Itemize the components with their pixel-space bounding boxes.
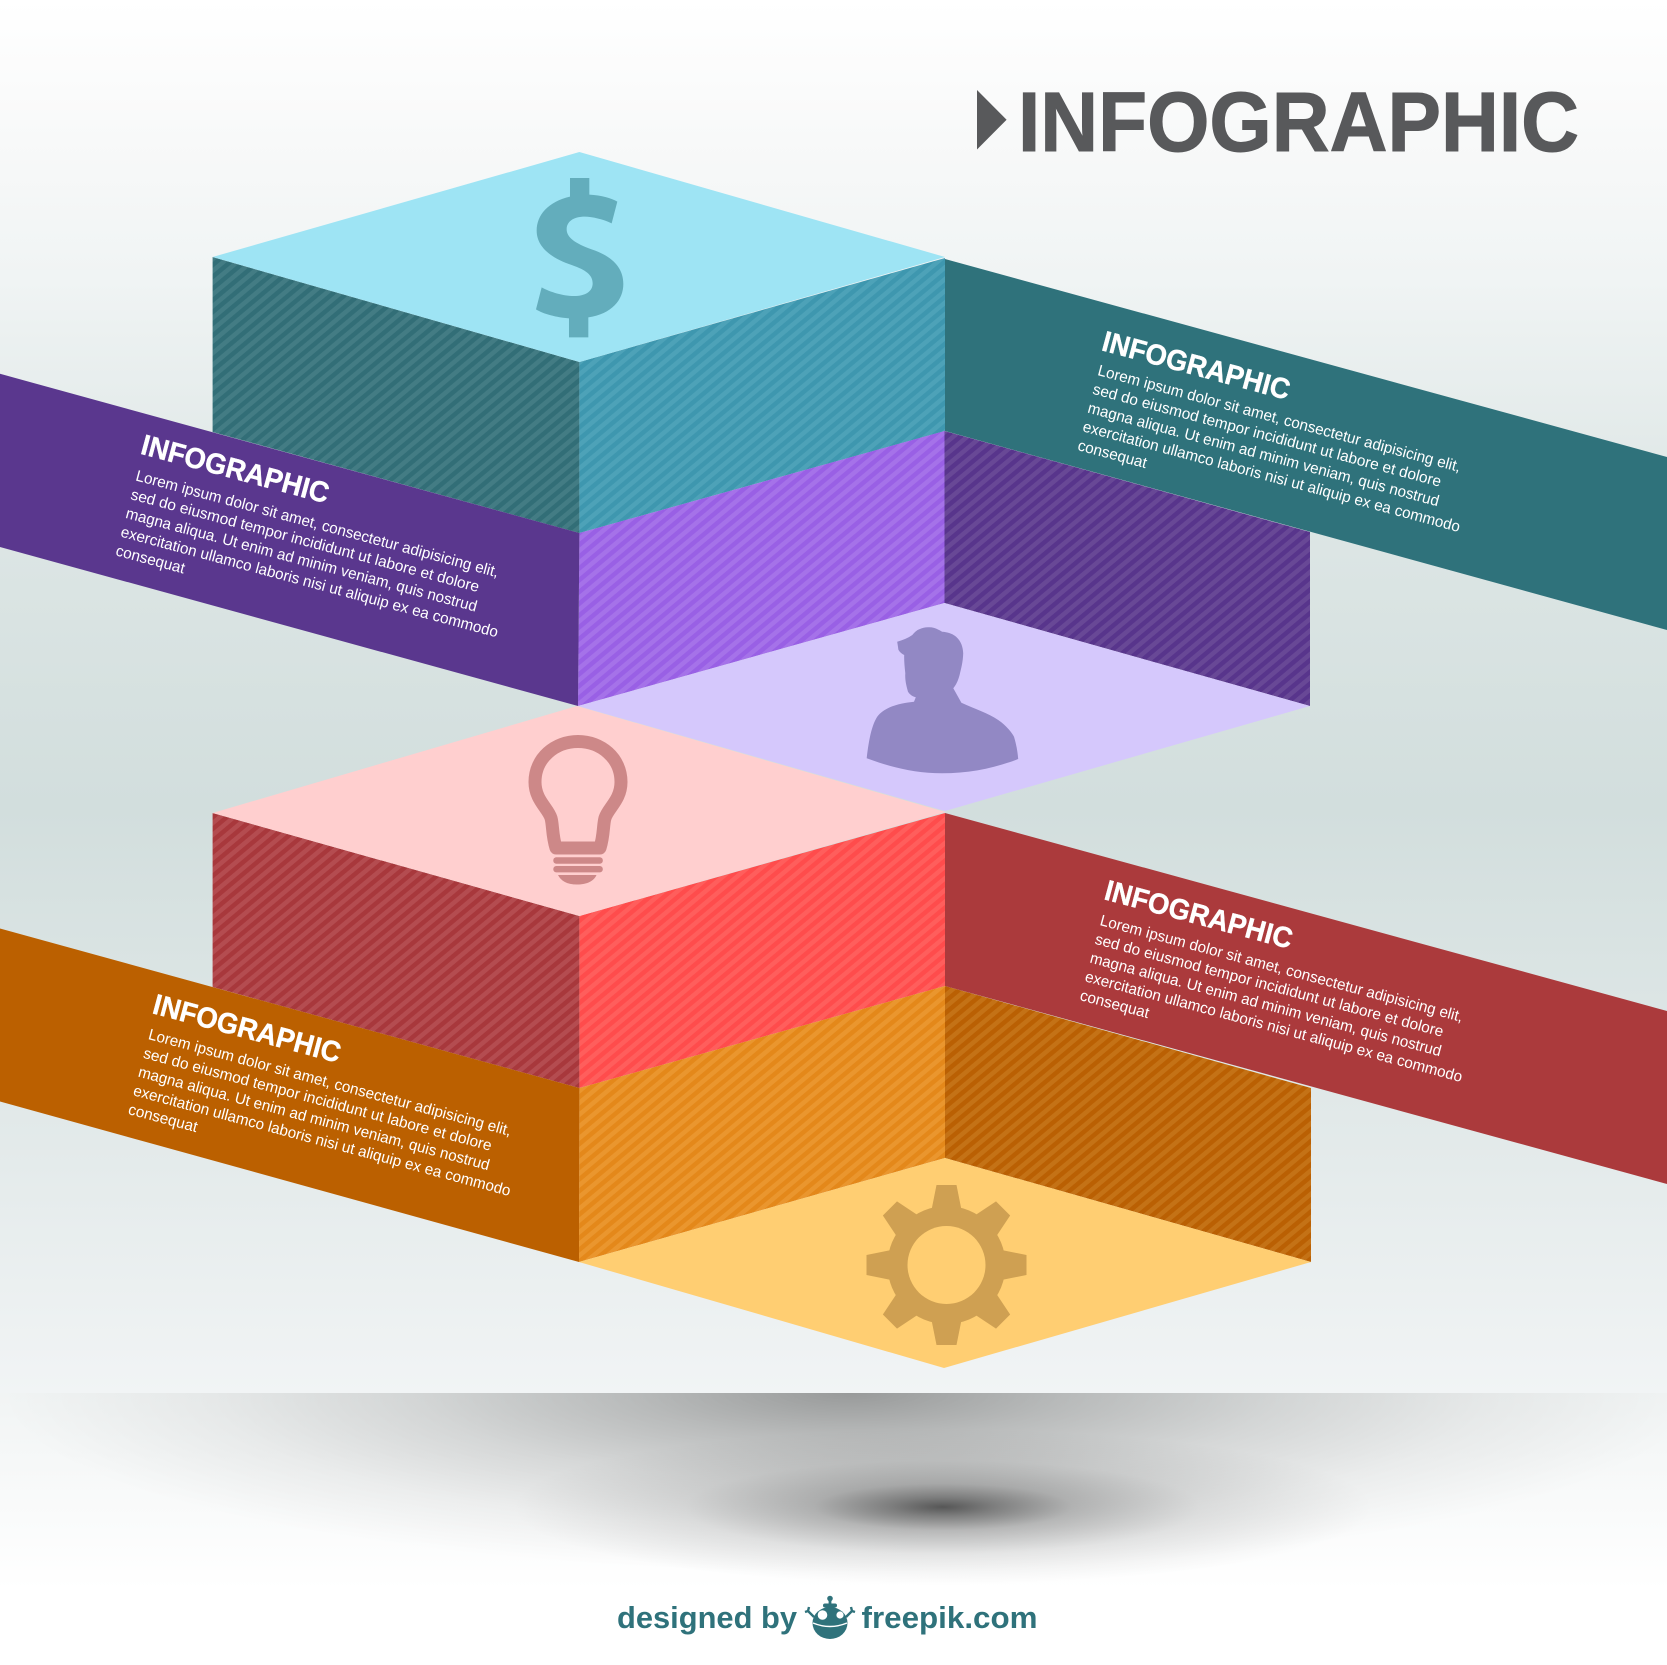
text: teal band [1073,326,1487,555]
text: purple band: INFOGRAPHIC [138,429,332,510]
credit: designed by freepik.com [617,1596,1038,1639]
icon: dollar [536,178,623,337]
credit: designed by freepik.com: freepik.com [862,1600,1038,1635]
text: orange band: exercitation ullamco laboris nisi ut aliquip ex ea commodo [131,1083,512,1200]
text: red band: Lorem ipsum dolor sit amet, consectetur adipisicing elit, [1098,912,1465,1026]
floor shadow [148,1393,1552,1572]
band: red [945,813,1667,1184]
text: orange band: magna aliqua. Ut enim ad minim veniam, quis nostrud [136,1064,491,1174]
block 1: cyan box with dollar [213,152,945,533]
band: purple [0,374,579,706]
title: INFOGRAPHIC [1018,75,1579,169]
text: teal band: INFOGRAPHIC [1099,326,1293,407]
text: orange band: Lorem ipsum dolor sit amet, consectetur adipisicing elit, [146,1026,513,1140]
text: purple band: sed do eiusmod tempor incididunt ut labore et dolore [129,486,481,596]
text: orange band: sed do eiusmod tempor incididunt ut labore et dolore [141,1045,494,1155]
text: orange band: consequat [126,1101,200,1136]
text: teal band: consequat [1076,437,1149,472]
text: red band: INFOGRAPHIC [1101,875,1296,956]
text: purple band: magna aliqua. Ut enim ad minim veniam, quis nostrud [124,505,479,616]
icon: gear [866,1185,1026,1345]
text: red band [1075,875,1489,1105]
text: red band: sed do eiusmod tempor incididunt ut labore et dolore [1093,931,1445,1041]
text: purple band: consequat [114,543,187,578]
text: red band: magna aliqua. Ut enim ad minim veniam, quis nostrud [1088,950,1443,1060]
text: orange band [123,989,537,1219]
text: teal band: sed do eiusmod tempor incididunt ut labore et dolore [1091,381,1443,491]
text: teal band: exercitation ullamco laboris nisi ut aliquip ex ea commodo [1081,419,1462,536]
text: orange band: INFOGRAPHIC [149,989,344,1070]
block 3: red box with bulb [213,706,946,1088]
block 2: purple box with person [578,431,1310,811]
text: red band: consequat [1078,987,1152,1022]
text: red band: exercitation ullamco laboris nisi ut aliquip ex ea commodo [1083,969,1464,1086]
band: orange [0,928,579,1262]
text: teal band: Lorem ipsum dolor sit amet, consectetur adipisicing elit, [1096,362,1463,476]
icon: light bulb [535,742,621,884]
icon: freepik robot [805,1596,855,1639]
text: purple band [111,429,525,660]
block 4: orange box with gear [579,986,1311,1368]
text: purple band: exercitation ullamco laboris nisi ut aliquip ex ea commodo [119,524,500,641]
credit: designed by freepik.com: designed by [617,1600,798,1635]
text: purple band: Lorem ipsum dolor sit amet, consectetur adipisicing elit, [134,468,501,581]
icon: person [867,627,1018,773]
band: teal [945,259,1667,630]
text: teal band: magna aliqua. Ut enim ad minim veniam, quis nostrud [1086,400,1441,510]
